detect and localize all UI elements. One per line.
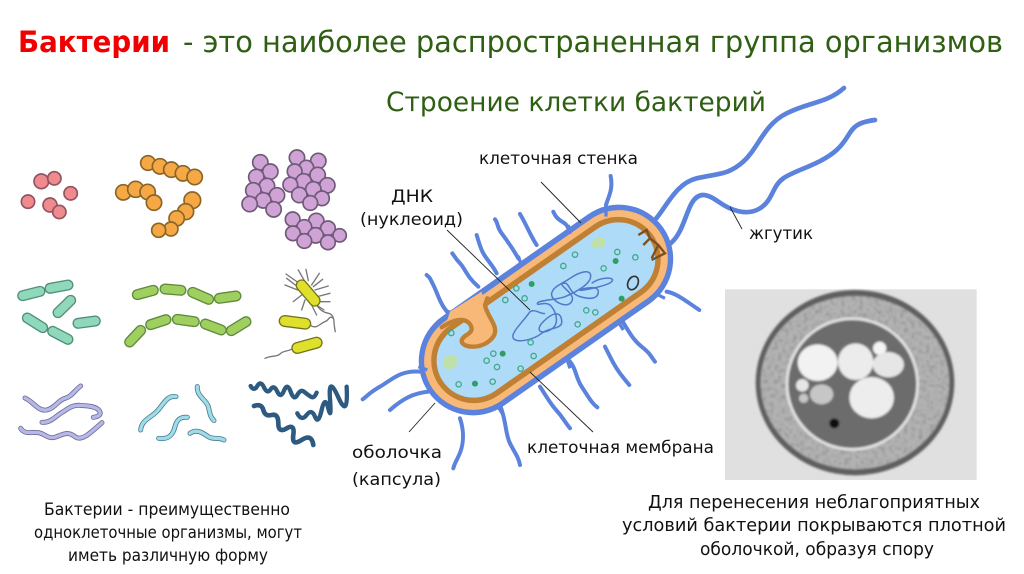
icon: flagella <box>653 88 875 245</box>
label: cell wall: клеточная стенка <box>479 149 638 169</box>
text block: spore caption: условий бактерии покрываются плотной <box>622 516 1006 536</box>
icon: DNA nucleoid <box>513 272 613 341</box>
label: DNA nucleoid <box>360 187 463 230</box>
icon: mesosome <box>442 292 495 347</box>
panel: bacteria shapes <box>21 150 347 445</box>
icon: wall pore <box>638 230 665 260</box>
text block: bacteria caption: иметь различную форму <box>68 546 268 566</box>
text block: spore caption: оболочкой, образуя спору <box>700 540 934 560</box>
image: spore micrograph <box>725 289 977 480</box>
text block: spore caption <box>622 493 1006 560</box>
text block: spore caption: Для перенесения неблагоприятных <box>648 493 980 513</box>
title: Бактерии <box>18 25 170 59</box>
title: - это наиболее распространенная группа организмов <box>183 25 1003 59</box>
subtitle: cell structure: Строение клетки бактерий <box>386 87 766 118</box>
icon: cell wall and capsule <box>397 183 695 437</box>
chart: bacterial cell diagram <box>363 88 875 468</box>
label: flagellum: жгутик <box>749 224 813 244</box>
icon: inclusions and plasmid <box>443 237 640 369</box>
label: DNA nucleoid: ДНК <box>391 187 433 207</box>
label: capsule: (капсула) <box>352 470 441 490</box>
text block: bacteria caption <box>34 500 302 566</box>
label: capsule <box>352 443 442 490</box>
icon: wall notches <box>418 205 665 415</box>
text block: bacteria caption: Бактерии - преимущественно <box>44 500 290 520</box>
label: cell membrane: клеточная мембрана <box>527 438 714 458</box>
icon: ribosomes <box>449 249 638 387</box>
icon: rods and flagellated bacilli <box>23 269 335 358</box>
icon: surface pili <box>363 176 699 468</box>
text block: bacteria caption: одноклеточные организмы, могут <box>34 523 302 543</box>
label lines <box>409 182 742 432</box>
icon: spirilla <box>21 383 347 445</box>
label: capsule: оболочка <box>352 443 442 463</box>
label: DNA nucleoid: (нуклеоид) <box>360 210 463 230</box>
icon: cocci group <box>21 150 346 250</box>
